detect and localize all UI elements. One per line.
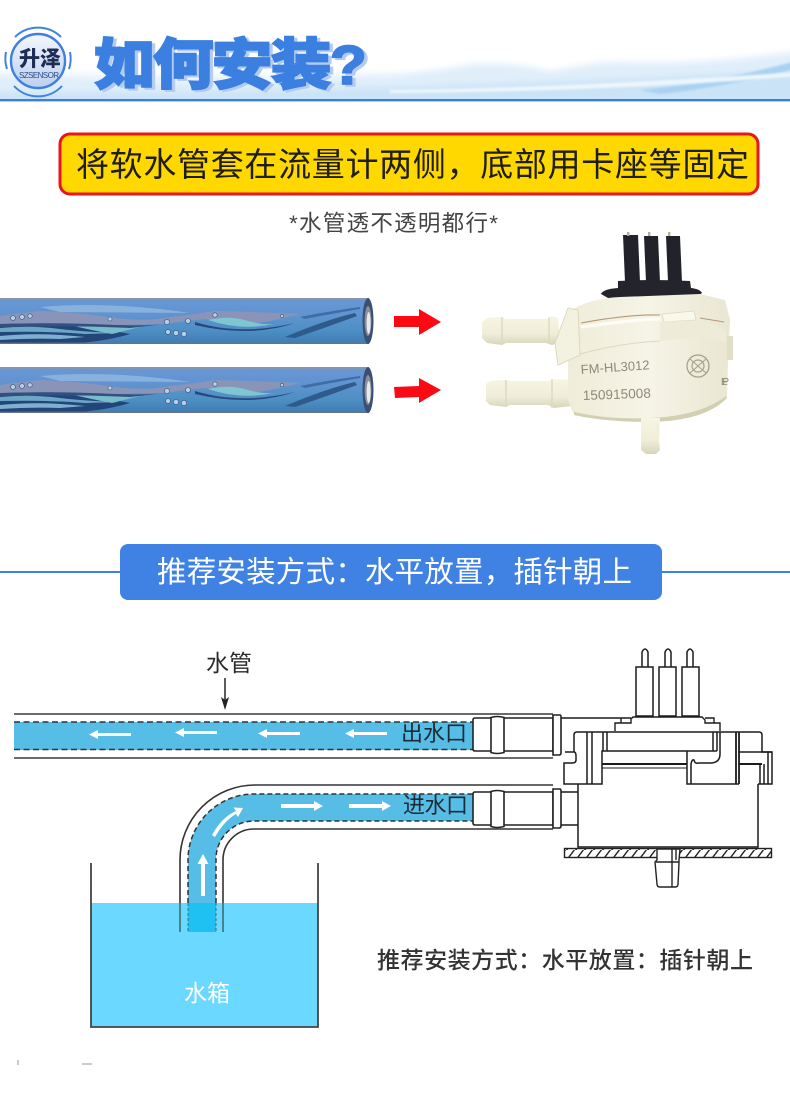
- caption: 推荐安装方式：水平放置：插针朝上: [377, 947, 753, 973]
- sensor line drawing: [561, 649, 772, 847]
- label: outlet: 出水口: [401, 721, 467, 746]
- header rule: [0, 99, 790, 101]
- logo: [5, 28, 71, 96]
- arrow: red upper: [394, 309, 441, 335]
- logo: 升泽: [19, 48, 61, 71]
- arrow: red lower: [394, 378, 441, 403]
- callout: yellow instruction box: [60, 134, 758, 194]
- sensor body: [568, 294, 730, 420]
- mounting plate: [564, 848, 772, 858]
- label: water pipe: 水管: [206, 650, 252, 676]
- water tube: upper: [0, 298, 374, 344]
- housing upper: [574, 732, 772, 784]
- connector: inlet: [473, 789, 561, 828]
- text: tube note: *水管透不透明都行*: [289, 211, 498, 236]
- printed model text: FM-HL3012: [580, 357, 650, 377]
- housing lower body: [578, 784, 758, 847]
- inlet tube with bend: [180, 785, 553, 932]
- sensor top cap: [561, 717, 720, 731]
- outlet tube: [14, 714, 553, 758]
- printed model text: [580, 357, 651, 403]
- black pins: [601, 232, 702, 298]
- label: inlet: 进水口: [403, 793, 468, 818]
- section banner: [0, 544, 790, 600]
- terminal pins: [636, 649, 699, 716]
- printed logo mark: EP: [721, 377, 729, 388]
- arrow: pipe pointer: [221, 678, 229, 710]
- water tank: [91, 863, 318, 1027]
- connector: outlet: [473, 715, 561, 755]
- header: [0, 26, 790, 102]
- printed logo mark: [687, 355, 729, 388]
- flow arrows: [198, 801, 391, 896]
- faint marks at bottom edge: [18, 1060, 92, 1065]
- printed model text: 150915008: [583, 386, 651, 403]
- bottom nozzle: [655, 849, 680, 887]
- title: 如何安装?: [94, 35, 367, 96]
- water tube: lower: [0, 367, 374, 413]
- section banner: 推荐安装方式：水平放置，插针朝上: [157, 556, 632, 589]
- flow arrows: [89, 728, 387, 739]
- logo: SZSENSOR: [19, 71, 59, 80]
- wave background band: [0, 50, 790, 99]
- callout: yellow instruction box: 将软水管套在流量计两侧，底部用卡座等固定: [76, 146, 749, 183]
- body clips and ridges: [555, 308, 733, 422]
- bottom nozzle: [641, 418, 660, 454]
- flow sensor photo: [482, 232, 733, 454]
- installation diagram: [14, 649, 772, 1027]
- inlet ports: [482, 316, 572, 408]
- label: tank: 水箱: [184, 980, 230, 1006]
